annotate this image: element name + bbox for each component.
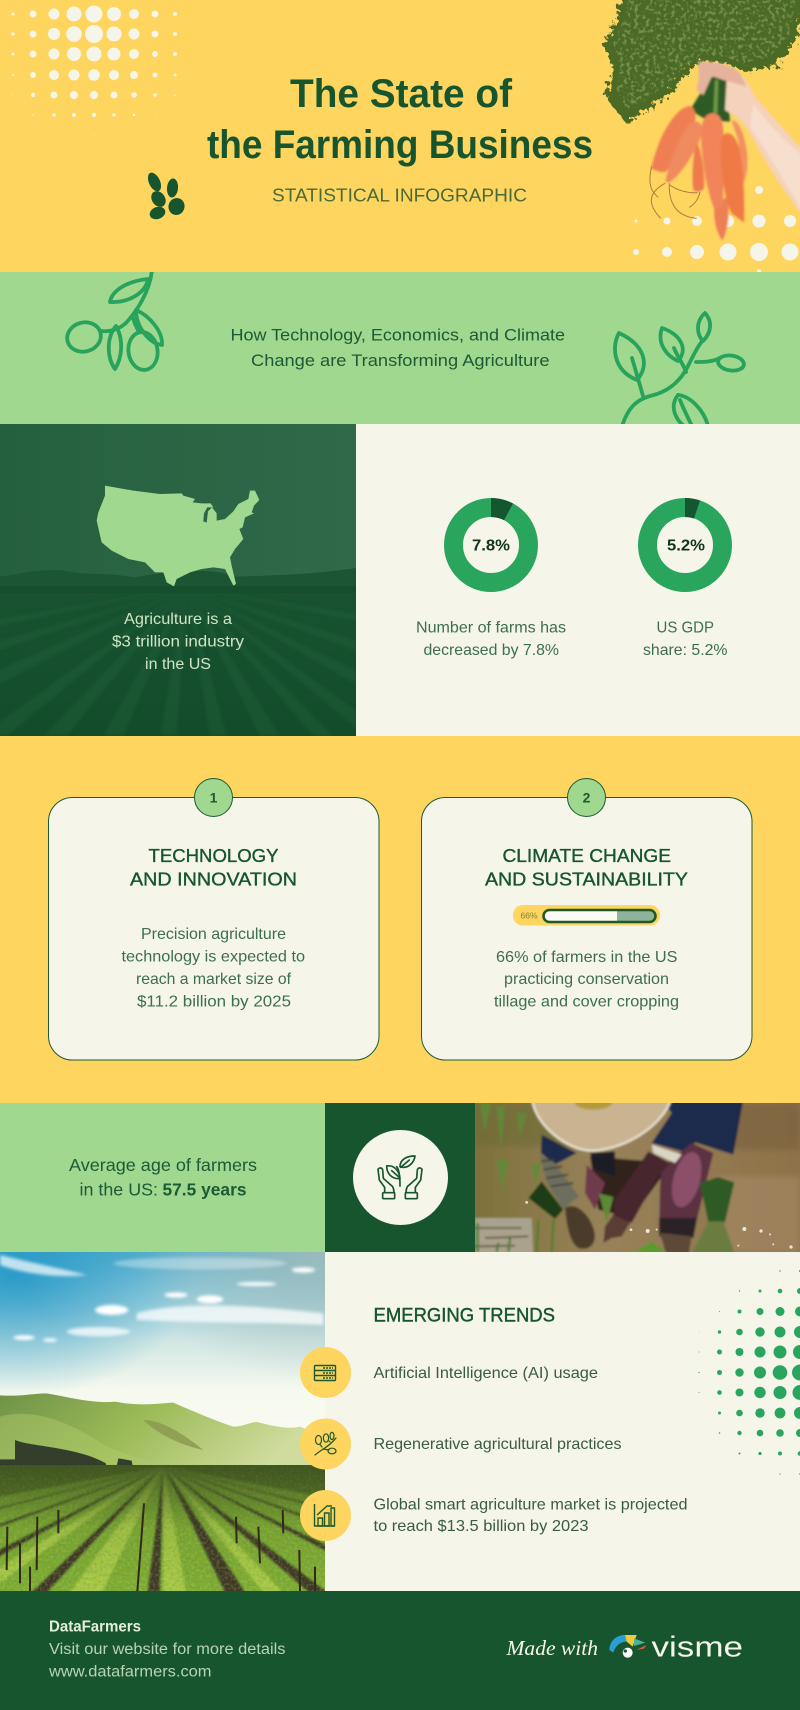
trend 1: artificial intelligence: Artificial Intelligence (AI) usage [374, 1365, 598, 1382]
donut caption: GDP: share: 5.2% [643, 642, 728, 659]
donut caption: farms: decreased by 7.8% [424, 642, 559, 659]
donut caption: farms: Number of farms has [416, 620, 566, 636]
halftone dots top-left [11, 6, 177, 136]
donut caption: GDP [643, 620, 728, 659]
footer contact text: Visit our website for more details [49, 1641, 286, 1658]
panel: emerging trends [0, 1250, 800, 1597]
card body: $11.2 billion by 2025 [137, 994, 291, 1010]
donut chart: 5.2% [648, 498, 722, 582]
panel: average age of farmers [0, 1103, 325, 1252]
footer contact text: DataFarmers [49, 1618, 141, 1636]
number badge 1 [194, 778, 232, 816]
card body: tillage and cover cropping [494, 994, 679, 1010]
photo: hand holding carrots [603, 0, 800, 241]
number badge 2 [568, 778, 606, 816]
made with visme badge: Made with [505, 1636, 598, 1660]
donut chart: 7.8%: 7.8% [472, 538, 510, 554]
card body: reach a market size of [136, 971, 292, 988]
intro text [230, 326, 565, 370]
card heading: AND INNOVATION [130, 868, 297, 890]
card: climate change and sustainability [422, 778, 752, 1060]
made with visme badge: visme [652, 1632, 743, 1664]
progress bar: 66% [513, 905, 660, 926]
map caption [112, 611, 244, 673]
card body [494, 949, 679, 1010]
intro text: How Technology, Economics, and Climate [230, 326, 565, 344]
number badge 1: 1 [210, 790, 218, 806]
icon: leafy sprig [615, 313, 745, 426]
photo: vineyard landscape [0, 1252, 325, 1591]
panel: average age of farmers: 57.5 years [162, 1180, 247, 1200]
trend 3: smart agriculture market: Global smart agriculture market is projected [374, 1496, 688, 1514]
card heading [485, 845, 688, 890]
intro text: Change are Transforming Agriculture [251, 351, 550, 370]
halftone dots [698, 1270, 800, 1475]
card heading: AND SUSTAINABILITY [485, 868, 688, 890]
icon: hands holding plant [378, 1156, 422, 1199]
card body: Precision agriculture [141, 926, 286, 943]
trend 3: smart agriculture market: to reach $13.5 billion by 2023 [374, 1518, 589, 1535]
logo mark [609, 1635, 647, 1658]
photo: farmer planting rice [475, 1103, 800, 1252]
donut caption: farms [416, 620, 566, 659]
trend 1: artificial intelligence [300, 1347, 598, 1398]
icon: sprig [315, 1432, 336, 1455]
trend 2: regenerative practices: Regenerative agricultural practices [374, 1436, 622, 1453]
panel: field with US map [0, 424, 356, 736]
footer contact text: www.datafarmers.com [48, 1664, 211, 1680]
title [207, 72, 593, 167]
title: The State of [290, 72, 513, 116]
icon: seeds [145, 171, 187, 221]
card body [122, 926, 305, 1010]
intro band [0, 270, 800, 426]
donut chart: 5.2%: 5.2% [667, 538, 705, 554]
footer [0, 1591, 800, 1710]
card body: technology is expected to [122, 948, 305, 966]
trend 3: smart agriculture market [300, 1490, 688, 1541]
photo: field rows (tinted) [0, 568, 356, 736]
map caption: in the US [145, 656, 211, 673]
icon: growth chart [314, 1504, 335, 1526]
yellow section background [0, 736, 800, 1103]
panel: donut statistics [356, 424, 800, 736]
subtitle: STATISTICAL INFOGRAPHIC [272, 186, 527, 206]
card body: practicing conservation [504, 971, 669, 988]
panel: average age of farmers: Average age of farmers [69, 1155, 257, 1175]
card heading: CLIMATE CHANGE [502, 845, 671, 866]
number badge 2: 2 [583, 790, 591, 806]
card body: 66% of farmers in the US [496, 949, 678, 966]
footer contact text [48, 1618, 286, 1680]
hero panel [0, 0, 800, 273]
halftone dots bottom-right [633, 186, 798, 273]
card heading: TECHNOLOGY [148, 845, 278, 866]
progress bar: 66%: 66% [520, 912, 538, 920]
donut chart: 7.8% [454, 498, 528, 582]
map caption: $3 trillion industry [112, 634, 244, 650]
title: the Farming Business [207, 123, 593, 167]
made with visme badge [505, 1632, 743, 1664]
donut caption: GDP: US GDP [656, 620, 714, 636]
panel: average age of farmers: in the US: [80, 1180, 158, 1200]
heading: emerging trends: EMERGING TRENDS [374, 1306, 555, 1326]
icon: olive branch [64, 270, 162, 372]
trend 2: regenerative practices [300, 1418, 622, 1470]
map caption: Agriculture is a [124, 611, 232, 628]
icon: server [314, 1366, 336, 1380]
US map [97, 486, 259, 586]
card heading [130, 845, 297, 890]
vineyard rows [0, 1468, 325, 1591]
panel: icon block [325, 1103, 475, 1252]
card: technology and innovation [48, 778, 379, 1060]
